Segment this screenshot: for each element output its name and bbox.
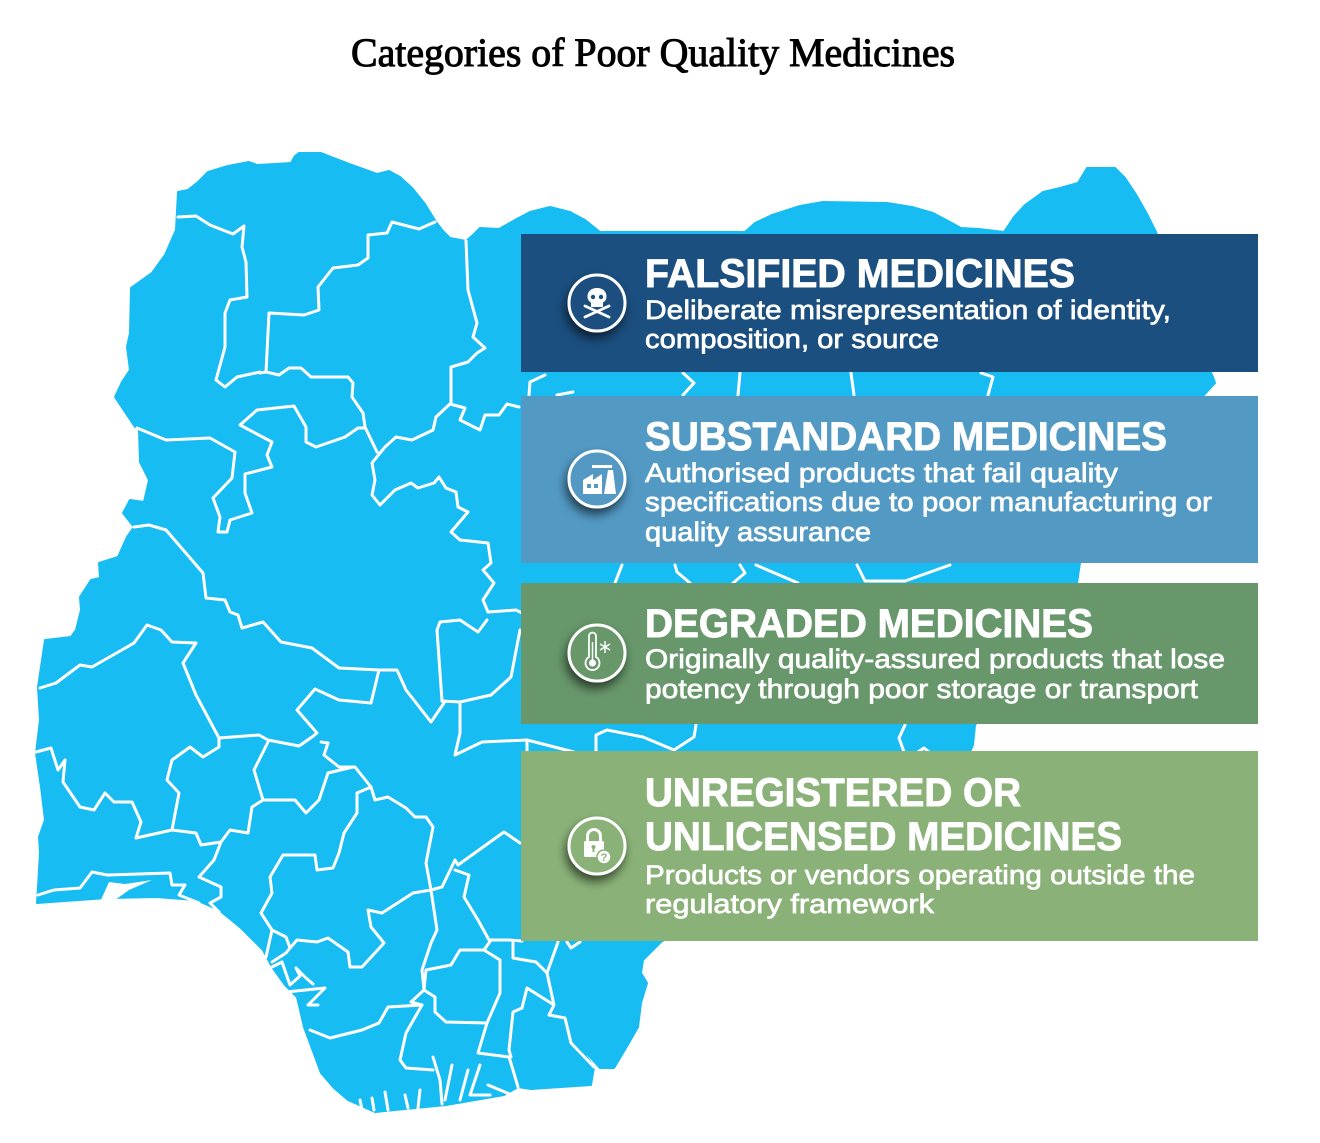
icon: padlock with question mark	[569, 818, 625, 874]
description: Deliberate misrepresentation of identity,	[645, 295, 1171, 325]
description	[645, 295, 1171, 354]
panel background	[521, 751, 1258, 941]
icon: skull and crossbones	[569, 275, 625, 331]
icon: factory	[569, 451, 625, 507]
coastal creeks	[272, 962, 512, 1110]
description: regulatory framework	[645, 889, 935, 919]
heading: DEGRADED MEDICINES	[645, 602, 1093, 646]
state boundaries central	[134, 525, 696, 755]
state boundaries south west	[36, 625, 520, 1070]
boundaries between panels	[529, 373, 993, 752]
description	[645, 644, 1225, 704]
heading: UNREGISTERED OR	[645, 771, 1021, 815]
icon: thermometer with snowflake	[569, 625, 625, 681]
state boundaries south east	[310, 870, 594, 1087]
title: Categories of Poor Quality Medicines	[351, 30, 955, 75]
description: composition, or source	[645, 324, 939, 354]
map silhouette	[36, 153, 1215, 1112]
lagoon	[100, 880, 152, 902]
description: potency through poor storage or transport	[645, 674, 1199, 704]
panel background	[521, 234, 1258, 372]
heading: SUBSTANDARD MEDICINES	[645, 415, 1167, 459]
panel: unregistered or unlicensed medicines	[521, 751, 1258, 941]
heading: UNLICENSED MEDICINES	[645, 815, 1122, 859]
panel background	[521, 396, 1258, 563]
description: specifications due to poor manufacturing or	[645, 487, 1212, 517]
icon: padlock with question mark: ?	[601, 852, 608, 864]
description: Authorised products that fail quality	[645, 458, 1119, 488]
description	[645, 458, 1212, 547]
state boundaries north	[137, 216, 522, 613]
map of Nigeria with state boundaries	[36, 153, 1215, 1112]
description	[645, 860, 1195, 919]
heading: FALSIFIED MEDICINES	[645, 252, 1075, 296]
panel: falsified medicines	[521, 234, 1258, 372]
description: Products or vendors operating outside the	[645, 860, 1195, 890]
panel background	[521, 583, 1258, 724]
description: quality assurance	[645, 517, 871, 547]
heading	[645, 771, 1122, 859]
description: Originally quality-assured products that lose	[645, 644, 1225, 674]
panel: substandard medicines	[521, 396, 1258, 563]
panel: degraded medicines	[521, 583, 1258, 724]
